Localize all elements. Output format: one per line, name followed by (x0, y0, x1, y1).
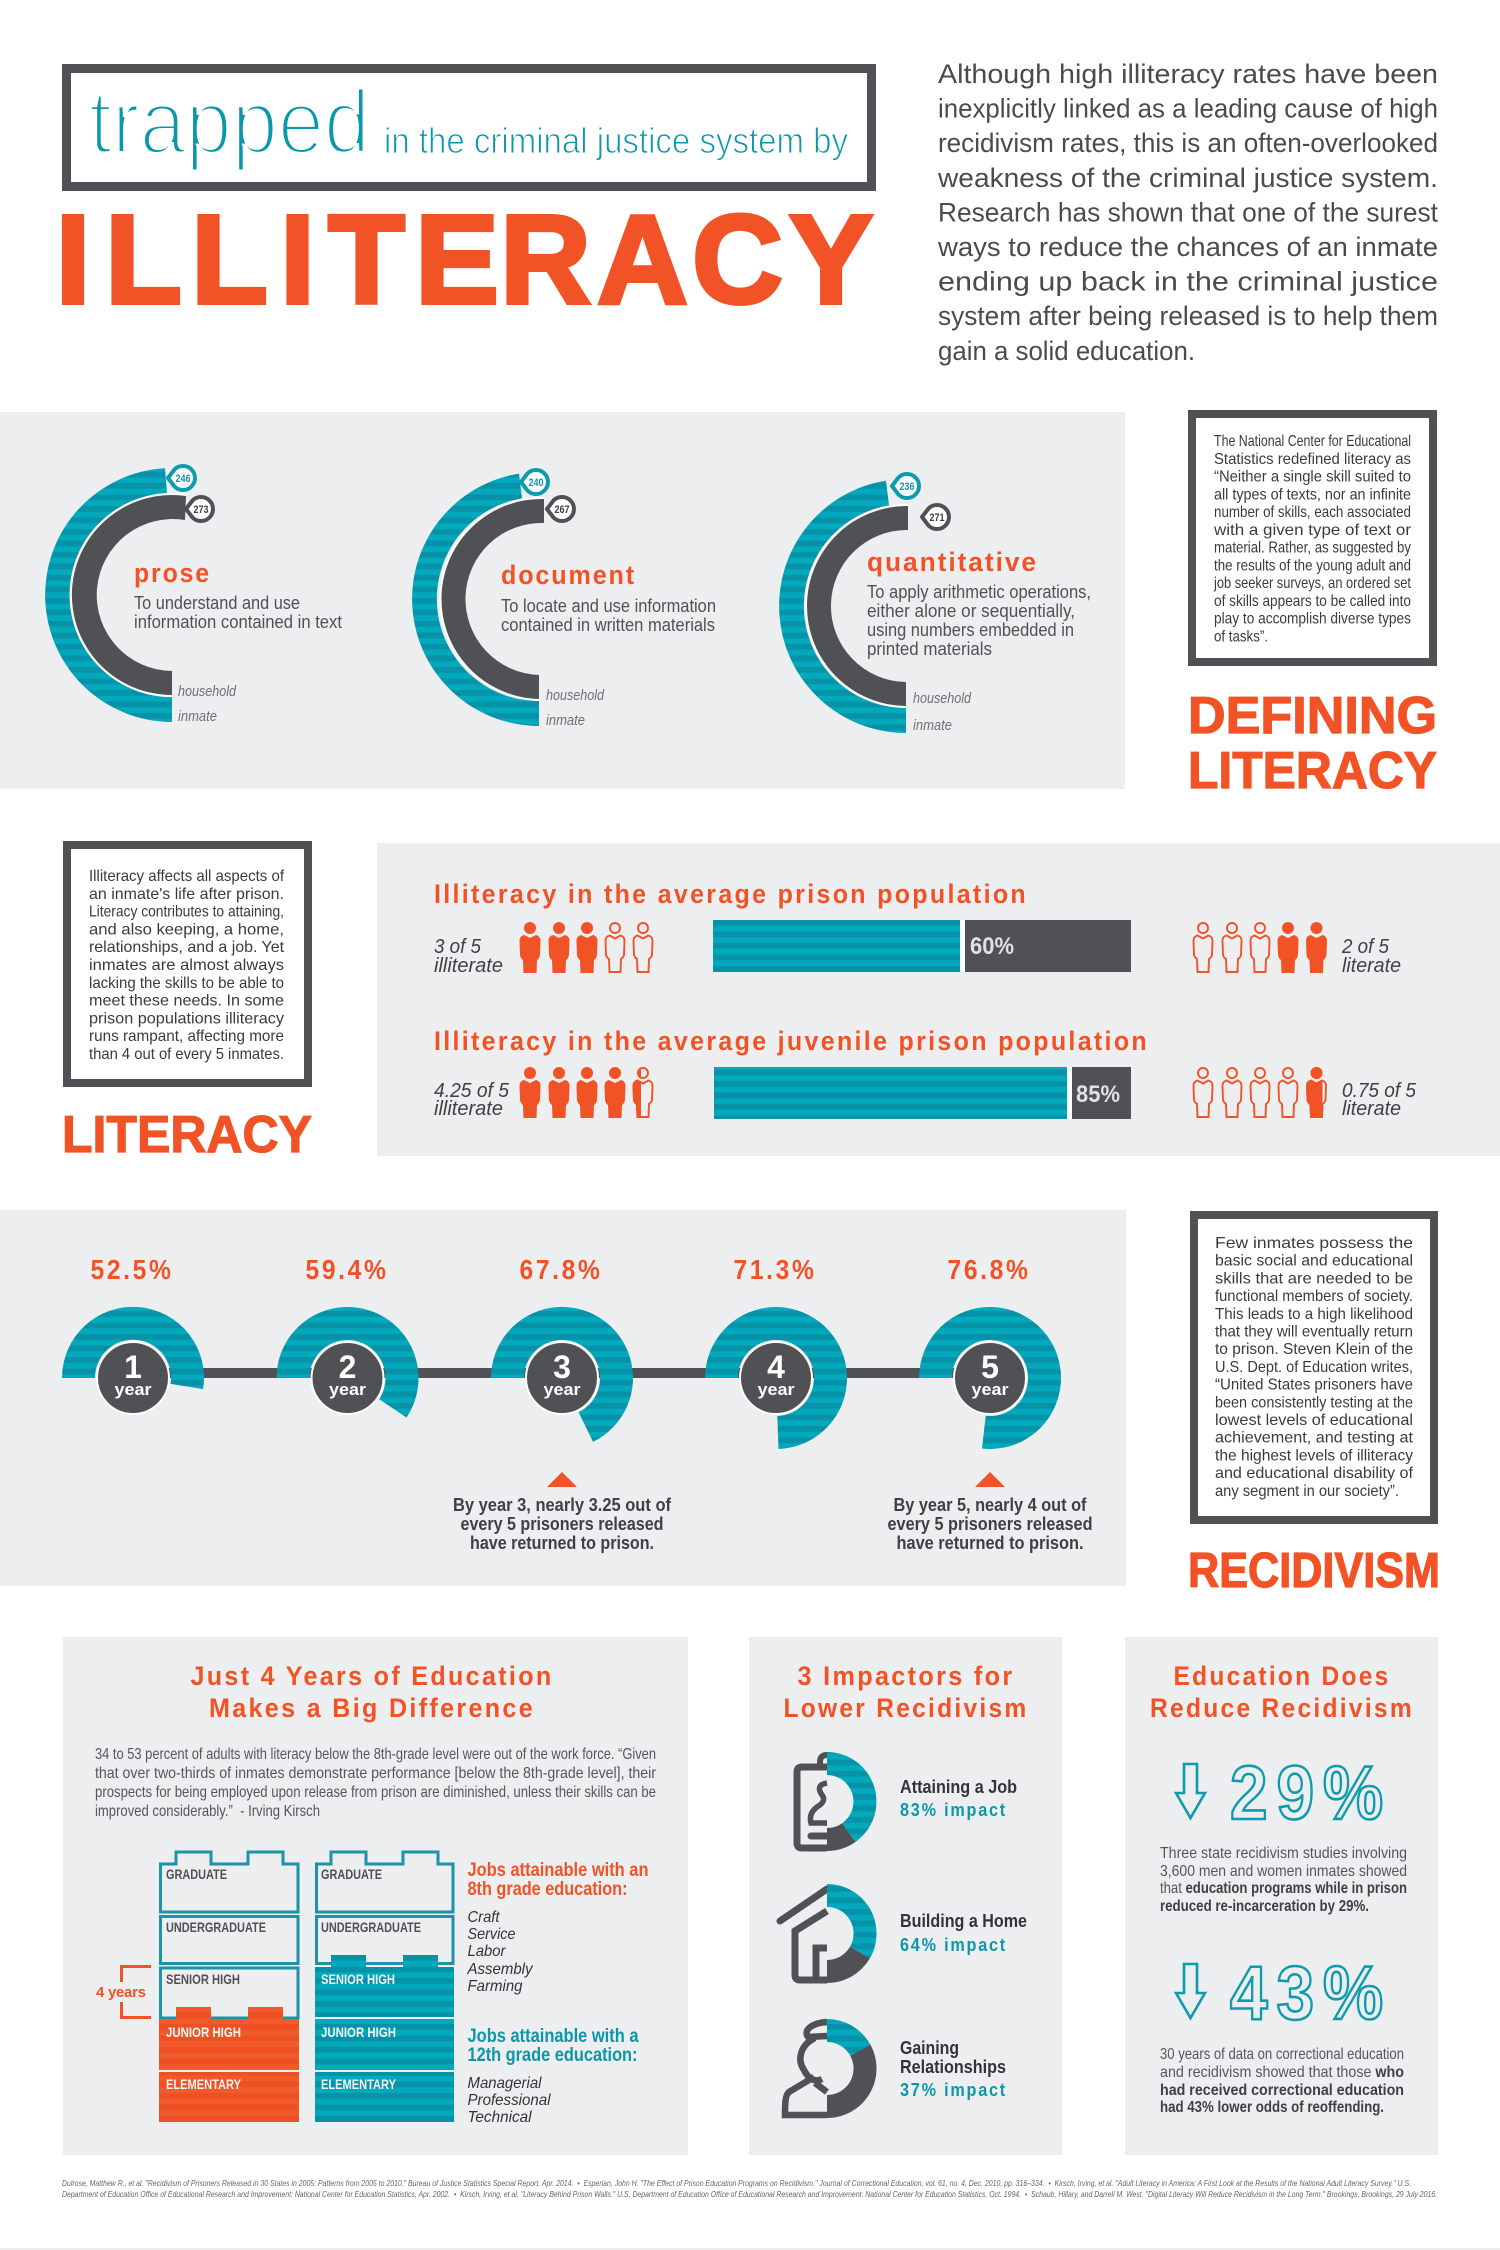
label: 3 of 5 illiterate: 3 of 5 (434, 936, 482, 958)
heading: 3 impactors: 3 Impactors for (798, 1661, 1014, 1691)
text box: definition of literacy: play to accomplish diverse types (1214, 610, 1411, 628)
text box: definition of literacy: The National Center for Educational (1214, 433, 1411, 450)
year 3: 67.8 percent: year (544, 1380, 581, 1399)
list: jobs with 8th grade education: Jobs attainable with an (468, 1860, 648, 1881)
list: jobs with 8th grade education: Assembly (467, 1961, 533, 1978)
text box: definition of literacy: material. Rather, as suggested by (1214, 540, 1411, 556)
text box: literacy effects: prison populations illiteracy (89, 1010, 284, 1027)
stack: 8th grade education: GRADUATE (166, 1866, 227, 1882)
label: gaining relationships: Relationships (900, 2057, 1006, 2077)
heading: average juvenile prison population: Illiteracy in the average juvenile prison population (434, 1026, 1149, 1056)
label: building a home: Building a Home (900, 1911, 1027, 1931)
chart: quantitative ring: inmate (913, 717, 952, 734)
chart: prose ring (45, 466, 342, 725)
year 1: 52.5 percent: 1 (124, 1349, 142, 1385)
paragraph: thirty years of data: 30 years of data on correctional education (1160, 2046, 1404, 2063)
chart: quantitative ring: quantitative (867, 547, 1038, 577)
text box: definition of literacy: Statistics redefined literacy as (1214, 451, 1411, 468)
text box: definition of literacy: all types of texts, nor an infinite (1214, 486, 1411, 503)
chart: quantitative ring: 271 (930, 512, 944, 524)
label: 2 of 5 literate: literate (1342, 955, 1401, 977)
paragraph: thirty years of data: had 43% lower odds of reoffending. (1160, 2099, 1384, 2116)
heading: just 4 years: Just 4 Years of Education (190, 1661, 554, 1691)
icon: relationships donut 37 percent (785, 2019, 877, 2118)
panel: recidivism timeline (0, 1210, 1126, 1586)
chart: quantitative ring: using numbers embedded in (867, 620, 1074, 640)
heading: just 4 years: Makes a Big Difference (209, 1693, 535, 1723)
label: 2 of 5 literate (1341, 936, 1401, 977)
timeline connector (133, 1368, 990, 1378)
icons: 0.75 of 5 literate people (1194, 1067, 1327, 1118)
list: jobs with 12th grade education: 12th grade education: (468, 2045, 638, 2066)
chart: prose ring: 246 (176, 473, 190, 485)
text box: definition of literacy: “Neither a single skill suited to (1214, 468, 1411, 486)
text box: recidivism: basic social and educational (1215, 1253, 1413, 1270)
label: building a home: 64% impact (900, 1935, 1007, 1955)
text box: recidivism: achievement, and testing at (1215, 1430, 1414, 1447)
heading: RECIDIVISM: RECIDIVISM (1188, 1544, 1440, 1598)
stack: 8th grade education: UNDERGRADUATE (166, 1919, 266, 1935)
text box: recidivism: Few inmates possess the (1215, 1235, 1413, 1252)
label: attaining a job: Attaining a Job (900, 1777, 1017, 1797)
text box: recidivism: functional members of society. (1215, 1288, 1413, 1305)
text box: literacy effects: lacking the skills to be able to (89, 975, 284, 992)
list: jobs with 8th grade education: 8th grade education: (468, 1879, 628, 1900)
callout: year 3: have returned to prison. (470, 1533, 654, 1553)
icon: job donut 83 percent (797, 1752, 876, 1851)
text box: recidivism: This leads to a high likelihood (1215, 1306, 1413, 1323)
text box: literacy effects: relationships, and a job. Yet (89, 939, 285, 956)
label: 4.25 of 5 illiterate: 4.25 of 5 (434, 1080, 510, 1102)
stack: 8th grade education: ELEMENTARY (166, 2076, 242, 2092)
chart: quantitative ring: printed materials (867, 639, 992, 659)
chart: document ring: contained in written materials (501, 615, 715, 635)
chart: document ring: To locate and use information (501, 596, 716, 616)
text box: literacy effects: and also keeping, a home, (89, 921, 284, 938)
footer: references (62, 2178, 1437, 2199)
icon: down arrow 43 percent (1176, 1964, 1205, 2018)
bar: 60 percent: 60% (970, 933, 1014, 960)
paragraph: thirty years of data (1160, 2046, 1404, 2116)
year 5: 76.8 percent: 5 (981, 1349, 999, 1385)
callout: year 3: every 5 prisoners released (460, 1514, 664, 1534)
year 2: 59.4 percent (276, 1254, 418, 1418)
text box: literacy effects: Illiteracy affects all aspects of (89, 868, 285, 885)
paragraph: thirty years of data: and recidivism showed that those who (1160, 2064, 1404, 2081)
chart: document ring: household (546, 687, 605, 704)
icons: 3 of 5 illiterate people (520, 922, 652, 973)
stack: 12th grade education: GRADUATE (321, 1866, 382, 1882)
callout: year 5: every 5 prisoners released (888, 1514, 1092, 1534)
year 3: 67.8 percent: 3 (553, 1349, 571, 1385)
stack: 12th grade education: ELEMENTARY (321, 2076, 397, 2092)
callout: year 5 (888, 1472, 1092, 1553)
heading: education reduces recidivism (1150, 1661, 1414, 1723)
paragraph: three state studies: 3,600 men and women inmates showed (1160, 1863, 1407, 1880)
text box: recidivism: the highest levels of illiteracy (1215, 1447, 1413, 1464)
heading: LITERACY: LITERACY (62, 1106, 312, 1164)
intro paragraph (937, 59, 1438, 366)
stat: 29 percent: 29% (1230, 1751, 1392, 1836)
year 4: 71.3 percent: year (758, 1380, 795, 1399)
text box: definition of literacy: of tasks”. (1214, 628, 1268, 645)
chart: prose ring: information contained in text (134, 612, 342, 632)
list: jobs with 8th grade education: Craft (468, 1909, 500, 1926)
list: jobs with 12th grade education: Jobs attainable with a (468, 2026, 639, 2047)
title box: trapped in the criminal justice system by: trapped (89, 73, 370, 173)
stack: 8th grade education (159, 1852, 299, 2122)
paragraph: Irving Kirsch quote: prospects for being employed upon release from prison are diminished, unless their skills can be (95, 1784, 656, 1801)
chart: document ring: 267 (554, 504, 570, 516)
paragraph: three state studies: reduced re-incarceration by 29%. (1160, 1898, 1369, 1915)
text box: definition of literacy: with a given type of text or (1213, 522, 1412, 539)
year 1: 52.5 percent: year (114, 1380, 152, 1399)
year 4: 71.3 percent: 4 (767, 1349, 785, 1385)
label: 4.25 of 5 illiterate (434, 1080, 510, 1120)
text box: definition of literacy: the results of the young adult and (1214, 557, 1411, 574)
text box: definition of literacy: job seeker surveys, an ordered set (1213, 575, 1411, 592)
title: ILLITERACY: ILLITERACY (56, 189, 873, 330)
callout: year 3: By year 3, nearly 3.25 out of (453, 1495, 672, 1515)
paragraph: Irving Kirsch quote: that over two-thirds of inmates demonstrate performance [below the 8th-grade level], their (95, 1765, 657, 1782)
chart: quantitative ring: household (913, 690, 972, 707)
list: jobs with 12th grade education (468, 2026, 639, 2126)
year 5: 76.8 percent: 76.8% (948, 1254, 1030, 1285)
label: 0.75 of 5 literate: literate (1342, 1098, 1401, 1120)
text box: definition of literacy: number of skills, each associated (1214, 504, 1411, 521)
label: gaining relationships: 37% impact (900, 2080, 1007, 2100)
label: gaining relationships (900, 2038, 1007, 2100)
bar: 85 percent: 85% (1076, 1081, 1120, 1108)
year 2: 59.4 percent: year (329, 1380, 366, 1399)
heading: 3 impactors: Lower Recidivism (784, 1693, 1028, 1723)
list: jobs with 8th grade education: Farming (468, 1978, 523, 1995)
year 2: 59.4 percent: 59.4% (306, 1254, 388, 1285)
callout: year 5: have returned to prison. (896, 1533, 1084, 1553)
list: jobs with 8th grade education: Labor (468, 1943, 506, 1960)
label: 4.25 of 5 illiterate: illiterate (434, 1098, 503, 1120)
chart: quantitative ring: 236 (900, 481, 914, 493)
chart: document ring: 240 (528, 477, 544, 489)
year 1: 52.5 percent (62, 1254, 204, 1414)
stack: 12th grade education (315, 1852, 454, 2122)
intro paragraph: system after being released is to help them (938, 301, 1438, 331)
text box: recidivism (1194, 1215, 1434, 1520)
panel: illiteracy in prison populations (377, 843, 1500, 1156)
text box: recidivism: skills that are needed to be (1215, 1270, 1413, 1287)
paragraph: three state studies: Three state recidivism studies involving (1160, 1845, 1407, 1862)
chart: document ring: inmate (546, 712, 585, 729)
stack: 12th grade education: UNDERGRADUATE (321, 1919, 421, 1935)
paragraph: thirty years of data: had received correctional education (1160, 2082, 1404, 2099)
title box: trapped in the criminal justice system by (66, 68, 872, 186)
chart: quantitative ring: To apply arithmetic operations, (867, 582, 1091, 602)
bracket: 4 years: 4 years (96, 1984, 146, 2001)
text box: recidivism: U.S. Dept. of Education writes, (1215, 1359, 1413, 1376)
stat: 43 percent: 43% (1230, 1951, 1392, 2036)
text box: definition of literacy (1192, 414, 1433, 662)
chart: prose ring: 273 (194, 504, 208, 516)
text box: literacy effects: an inmate's life after prison. (89, 886, 284, 903)
label: gaining relationships: Gaining (900, 2038, 959, 2058)
icon: home donut 64 percent (780, 1884, 877, 1983)
text box: recidivism: to prison. Steven Klein of the (1215, 1341, 1413, 1358)
heading: education reduces recidivism: Reduce Recidivism (1150, 1693, 1414, 1723)
chart: quantitative ring: either alone or sequentially, (867, 601, 1075, 621)
panel: just 4 years of education (63, 1637, 688, 2155)
text box: literacy effects (67, 845, 308, 1083)
year 5: 76.8 percent: year (972, 1380, 1009, 1399)
list: jobs with 12th grade education: Professional (468, 2092, 551, 2109)
label: 0.75 of 5 literate (1342, 1080, 1417, 1120)
heading: average prison population: Illiteracy in the average prison population (434, 879, 1028, 909)
chart: document ring (412, 470, 716, 729)
year 1: 52.5 percent: 52.5% (90, 1254, 174, 1285)
title box: trapped in the criminal justice system by: in the criminal justice system by (384, 120, 848, 161)
intro paragraph: ways to reduce the chances of an inmate (937, 232, 1438, 262)
bar: 60 percent (713, 920, 1131, 972)
paragraph: Irving Kirsch quote (95, 1746, 657, 1820)
panel: 3 impactors (749, 1637, 1062, 2155)
label: attaining a job (900, 1777, 1017, 1820)
stack: 8th grade education: JUNIOR HIGH (166, 2024, 241, 2040)
intro paragraph: recidivism rates, this is an often-overlooked (938, 128, 1438, 158)
list: jobs with 8th grade education (467, 1860, 648, 1995)
intro paragraph: Research has shown that one of the surest (938, 197, 1438, 227)
callout: year 5: By year 5, nearly 4 out of (894, 1495, 1087, 1515)
panel: literacy types (0, 412, 1125, 789)
stack: 8th grade education: SENIOR HIGH (166, 1971, 240, 1987)
bracket: 4 years (94, 1966, 151, 2018)
list: jobs with 12th grade education: Technical (468, 2109, 532, 2126)
text box: literacy effects: inmates are almost always (89, 957, 284, 974)
intro paragraph: inexplicitly linked as a leading cause of high (938, 94, 1438, 124)
list: jobs with 8th grade education: Service (468, 1926, 516, 1943)
icon: down arrow 29 percent (1176, 1764, 1205, 1818)
text box: definition of literacy: of skills appears to be called into (1214, 593, 1411, 610)
heading: DEFINING LITERACY: DEFINING (1188, 687, 1437, 745)
panel: education does reduce recidivism (1125, 1637, 1438, 2155)
icons: 2 of 5 literate people (1194, 922, 1327, 973)
year 4: 71.3 percent: 71.3% (734, 1254, 816, 1285)
chart: prose ring: prose (134, 558, 211, 588)
paragraph: Irving Kirsch quote: improved considerably.” - Irving Kirsch (95, 1803, 320, 1820)
year 3: 67.8 percent (491, 1254, 633, 1442)
text box: recidivism: been consistently testing at the (1215, 1394, 1413, 1411)
bar: 85 percent (714, 1067, 1131, 1119)
text box: recidivism: lowest levels of educational (1215, 1412, 1413, 1429)
icons: 4.25 of 5 illiterate people (520, 1067, 654, 1118)
stack: 12th grade education: SENIOR HIGH (321, 1971, 395, 1987)
text box: literacy effects: than 4 out of every 5 inmates. (89, 1046, 284, 1063)
heading: DEFINING LITERACY: LITERACY (1188, 742, 1437, 800)
label: 0.75 of 5 literate: 0.75 of 5 (1342, 1080, 1417, 1102)
year 5: 76.8 percent (919, 1254, 1061, 1449)
paragraph: three state studies: that education programs while in prison (1160, 1880, 1407, 1897)
intro paragraph: gain a solid education. (938, 336, 1195, 366)
text box: literacy effects: runs rampant, affecting more (89, 1028, 284, 1045)
heading: DEFINING LITERACY (1188, 687, 1437, 800)
heading: education reduces recidivism: Education Does (1174, 1661, 1390, 1691)
intro paragraph: Although high illiteracy rates have been (938, 59, 1438, 89)
label: attaining a job: 83% impact (900, 1800, 1007, 1820)
label: 3 of 5 illiterate: illiterate (434, 955, 503, 977)
paragraph: three state studies (1160, 1845, 1407, 1915)
intro paragraph: ending up back in the criminal justice (938, 267, 1438, 297)
chart: prose ring: inmate (178, 708, 217, 725)
chart: quantitative ring (779, 474, 1091, 734)
chart: prose ring: household (178, 683, 237, 700)
label: 3 of 5 illiterate (434, 936, 503, 977)
label: 2 of 5 literate: 2 of 5 (1341, 936, 1390, 958)
paragraph: Irving Kirsch quote: 34 to 53 percent of adults with literacy below the 8th-grade level were out of the work force. “Given (95, 1746, 656, 1763)
text box: recidivism: “United States prisoners have (1215, 1377, 1413, 1394)
heading: just 4 years (190, 1661, 554, 1723)
text box: literacy effects: meet these needs. In some (89, 993, 284, 1010)
year 2: 59.4 percent: 2 (339, 1349, 356, 1385)
list: jobs with 12th grade education: Managerial (468, 2075, 542, 2092)
label: building a home (900, 1911, 1027, 1955)
year 3: 67.8 percent: 67.8% (520, 1254, 602, 1285)
text box: recidivism: that they will eventually return (1215, 1324, 1413, 1340)
intro paragraph: weakness of the criminal justice system. (937, 163, 1438, 193)
stack: 12th grade education: JUNIOR HIGH (321, 2024, 396, 2040)
text box: recidivism: any segment in our society”. (1215, 1483, 1399, 1500)
text box: literacy effects: Literacy contributes to attaining, (89, 904, 284, 921)
chart: document ring: document (501, 560, 636, 590)
chart: prose ring: To understand and use (134, 593, 300, 613)
year 4: 71.3 percent (705, 1254, 847, 1449)
text box: recidivism: and educational disability of (1215, 1465, 1414, 1482)
callout: year 3 (453, 1472, 672, 1553)
heading: 3 impactors (784, 1661, 1028, 1723)
